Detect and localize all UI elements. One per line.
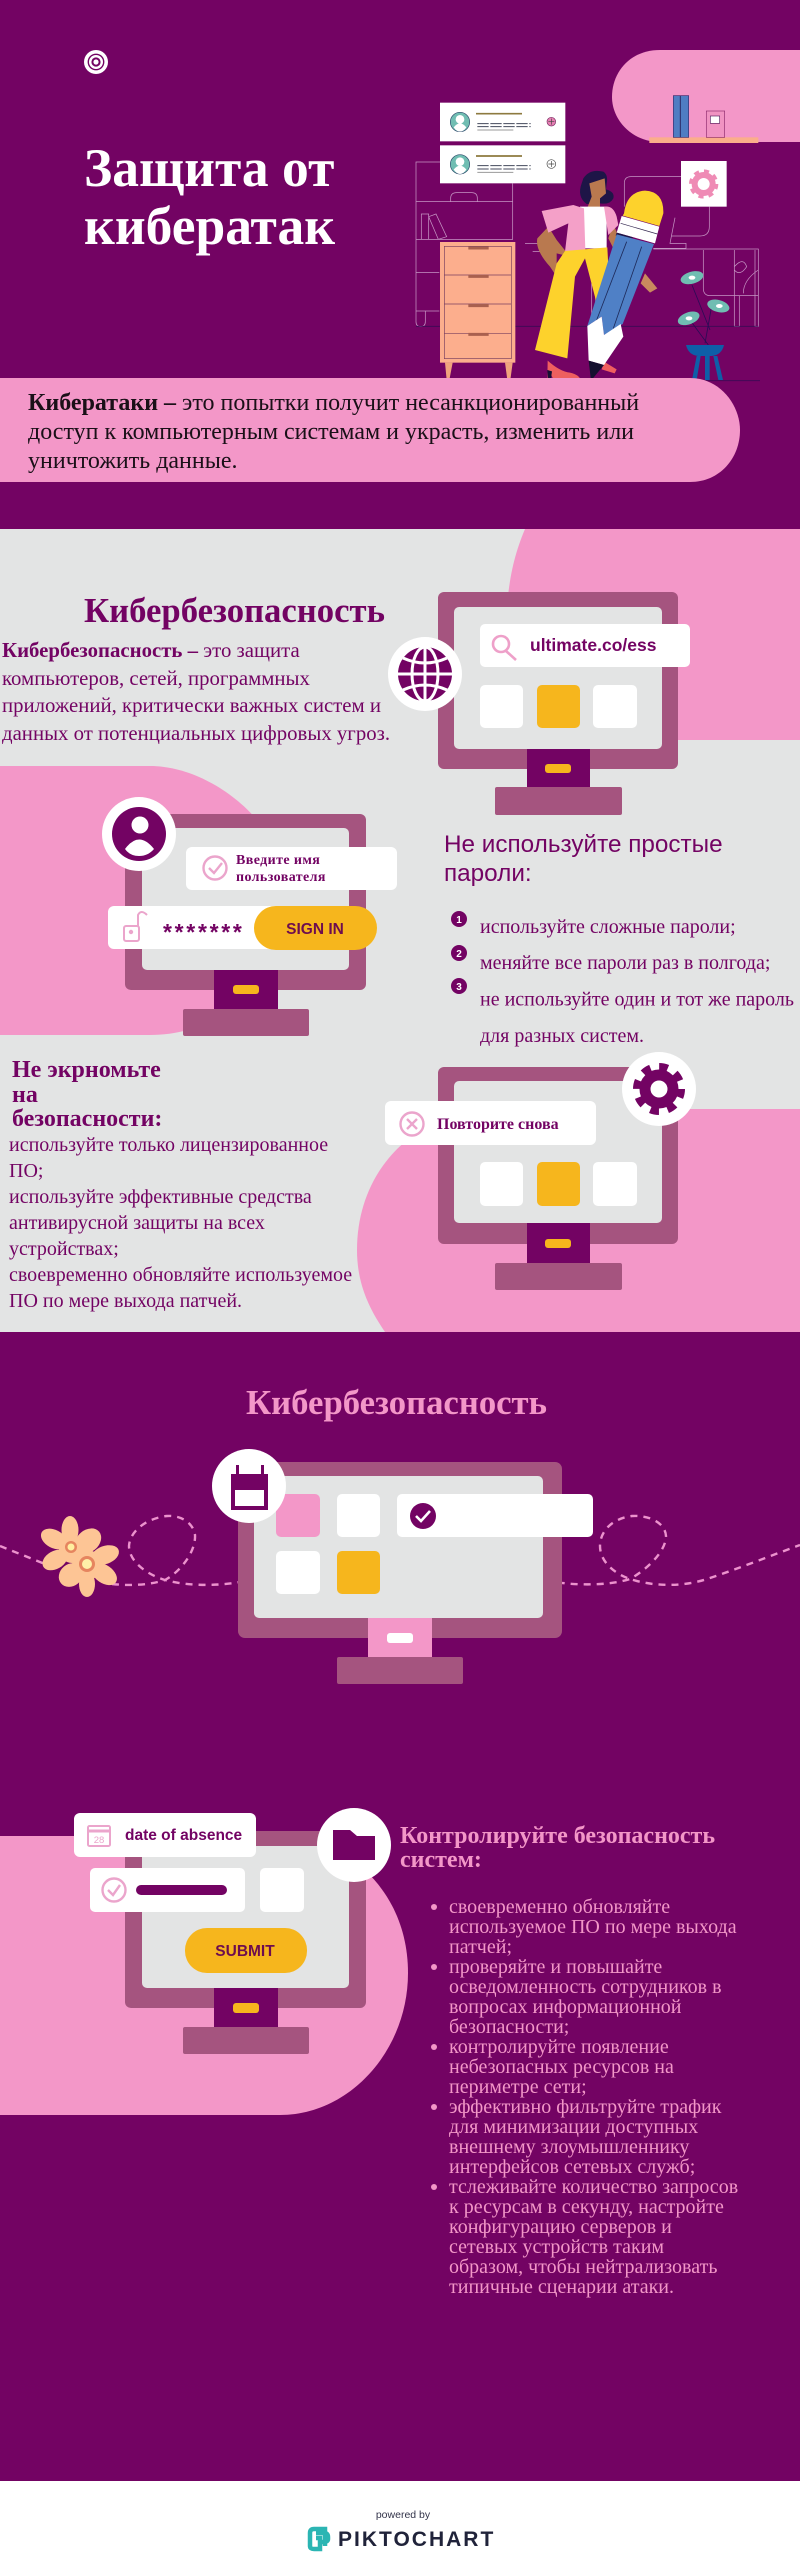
monitor: retry <box>385 1067 678 1290</box>
icon: user avatar <box>102 797 176 871</box>
retry message box: Повторите снова <box>437 1116 559 1133</box>
text: security recommendations: своевременно обновляйте используемое <box>9 1264 352 1286</box>
text: security recommendations: используйте только лицензированное <box>9 1134 328 1156</box>
bullet list: control measures: эффективно фильтруйте трафик <box>449 2096 722 2118</box>
monitor: calendar <box>238 1462 593 1684</box>
panel: header background <box>0 0 800 529</box>
decorative pink shape left <box>0 766 290 1035</box>
heading: cybersecurity: Кибербезопасность <box>84 591 385 630</box>
text: security recommendations: используйте эффективные средства <box>9 1186 312 1208</box>
password field <box>108 906 298 949</box>
bullet list: control measures: тслеживайте количество запросов <box>449 2176 738 2198</box>
plant on stool <box>676 269 731 380</box>
username field: пользователя <box>236 870 326 885</box>
gear card <box>681 161 727 207</box>
password field: ******* <box>163 919 245 945</box>
bullet list: control measures: осведомленность сотрудников в <box>449 1976 722 1998</box>
pencil <box>587 191 663 381</box>
icon: piktochart logo <box>310 2529 328 2549</box>
icon: target logo <box>84 50 108 74</box>
monitor: form <box>74 1813 366 2054</box>
bullet list: control measures: своевременно обновляйте <box>449 1896 670 1918</box>
shelf with books <box>649 96 758 143</box>
bullet list: control measures: периметре сети; <box>449 2076 587 2098</box>
numbered list: passwords <box>451 911 794 1047</box>
ground lines <box>416 326 760 381</box>
bullet list: control measures: контролируйте появление <box>449 2036 669 2058</box>
heading: do not economize on security: Не экрномьте <box>12 1057 161 1083</box>
username field: Введите имя <box>236 853 320 868</box>
bullet list: control measures: интерфейсов сетевых служб; <box>449 2156 695 2178</box>
text: security recommendations: устройствах; <box>9 1238 119 1260</box>
heading: do not use simple passwords: Не используйте простые <box>444 831 723 858</box>
bullet list: control measures: конфигурацию серверов и <box>449 2216 672 2238</box>
line art furniture <box>416 162 758 327</box>
monitor: login <box>108 814 397 1036</box>
numbered list: passwords: 1 <box>456 915 462 926</box>
bullet list: control measures: небезопасных ресурсов на <box>449 2056 674 2078</box>
numbered list: passwords: меняйте все пароли раз в полгода; <box>480 952 770 974</box>
submit button <box>185 1928 307 1973</box>
bullet list: control measures: образом, чтобы нейтрализовать <box>449 2256 717 2278</box>
heading: do not economize on security: безопасности: <box>12 1106 162 1132</box>
decorative pink shape top right <box>506 529 800 740</box>
illustration: woman with giant pencil in office <box>416 96 760 385</box>
bullet list: control measures: для минимизации доступных <box>449 2116 698 2138</box>
bullet list: control measures: патчей; <box>449 1936 512 1958</box>
bullet list: control measures: проверяйте и повышайте <box>449 1956 662 1978</box>
text: definition of cyberattacks: Кибератаки – <box>28 390 182 416</box>
icon: gear <box>622 1052 696 1126</box>
sign in button <box>254 906 377 950</box>
woman <box>535 171 657 381</box>
dashed path left <box>0 1516 250 1585</box>
username field <box>186 847 397 890</box>
numbered list: passwords: не используйте один и тот же пароль <box>480 988 794 1010</box>
heading: do not use simple passwords: пароли: <box>444 860 532 887</box>
text: definition of cyberattacks: доступ к компьютерным системам и украсть, изменить или <box>28 419 634 445</box>
text: cybersecurity definition: это защита <box>203 639 300 662</box>
text: security recommendations: ПО; <box>9 1160 43 1182</box>
date field: 28 <box>94 1835 104 1846</box>
icon: calendar <box>212 1449 286 1523</box>
date field: date of absence <box>125 1827 243 1844</box>
bullet list: control measures: вопросах информационной <box>449 1996 682 2018</box>
panel: light section background <box>0 529 800 1332</box>
text: cybersecurity definition: компьютеров, сетей, программных <box>2 667 310 690</box>
filing cabinet <box>440 242 515 380</box>
text: security recommendations: антивирусной защиты на всех <box>9 1212 265 1234</box>
decorative pink shape behind shelf <box>612 50 800 142</box>
retry message box <box>385 1101 596 1145</box>
text: definition of cyberattacks: уничтожить данные. <box>28 448 238 474</box>
bullet list: control measures: безопасности; <box>449 2016 569 2038</box>
checked field <box>397 1494 593 1537</box>
icon: folder <box>317 1808 391 1882</box>
dashed path right <box>545 1516 800 1585</box>
bullet list: control measures: к ресурсам в секунду, настройте <box>449 2196 724 2218</box>
date field <box>74 1813 256 1857</box>
panel: footer <box>0 2481 800 2571</box>
text: cybersecurity definition: Кибербезопасность – <box>2 639 203 662</box>
text: definition of cyberattacks: это попытки получит несанкционированный <box>182 390 639 416</box>
text: cybersecurity definition: данных от потенциальных цифровых угроз. <box>2 722 390 745</box>
panel: footer: powered by <box>376 2509 431 2521</box>
heading: control system security: Контролируйте безопасность <box>400 1823 715 1849</box>
decorative pink shape behind form <box>0 1836 408 2115</box>
sign in button: SIGN IN <box>286 921 344 938</box>
panel: pink definition band <box>0 378 740 482</box>
bullet list: control measures: сетевых устройств таким <box>449 2236 664 2258</box>
search bar <box>480 624 690 667</box>
heading: cybersecurity pink: Кибербезопасность <box>246 1383 547 1422</box>
bullet list: control measures: типичные сценарии атаки. <box>449 2276 674 2298</box>
text: security recommendations: ПО по мере выхода патчей. <box>9 1290 242 1312</box>
checked input <box>90 1868 245 1912</box>
icon: globe <box>388 637 462 711</box>
title: Защита от <box>84 138 334 198</box>
numbered list: passwords: используйте сложные пароли; <box>480 916 736 938</box>
text: cybersecurity definition: приложений, критически важных систем и <box>2 694 381 717</box>
heading: do not economize on security: на <box>12 1082 38 1108</box>
search bar: ultimate.co/ess <box>530 635 657 655</box>
submit button: SUBMIT <box>215 1943 275 1960</box>
numbered list: passwords: для разных систем. <box>480 1025 644 1047</box>
numbered list: passwords: 3 <box>456 982 462 993</box>
bullet list: control measures: используемое ПО по мере выхода <box>449 1916 737 1938</box>
heading: control system security: систем: <box>400 1847 482 1873</box>
numbered list: passwords: 2 <box>456 949 462 960</box>
title: кибератак <box>84 196 335 256</box>
icon: flowers <box>37 1516 122 1597</box>
monitor: search <box>438 592 690 815</box>
panel: dark section background <box>0 1332 800 2481</box>
panel: footer: PIKTOCHART <box>338 2528 495 2551</box>
bullet list: control measures: внешнему злоумышленнику <box>449 2136 689 2158</box>
decorative pink shape lower right <box>357 1109 800 1332</box>
profile cards <box>440 103 565 183</box>
bullet list: control measures <box>431 1896 738 2298</box>
